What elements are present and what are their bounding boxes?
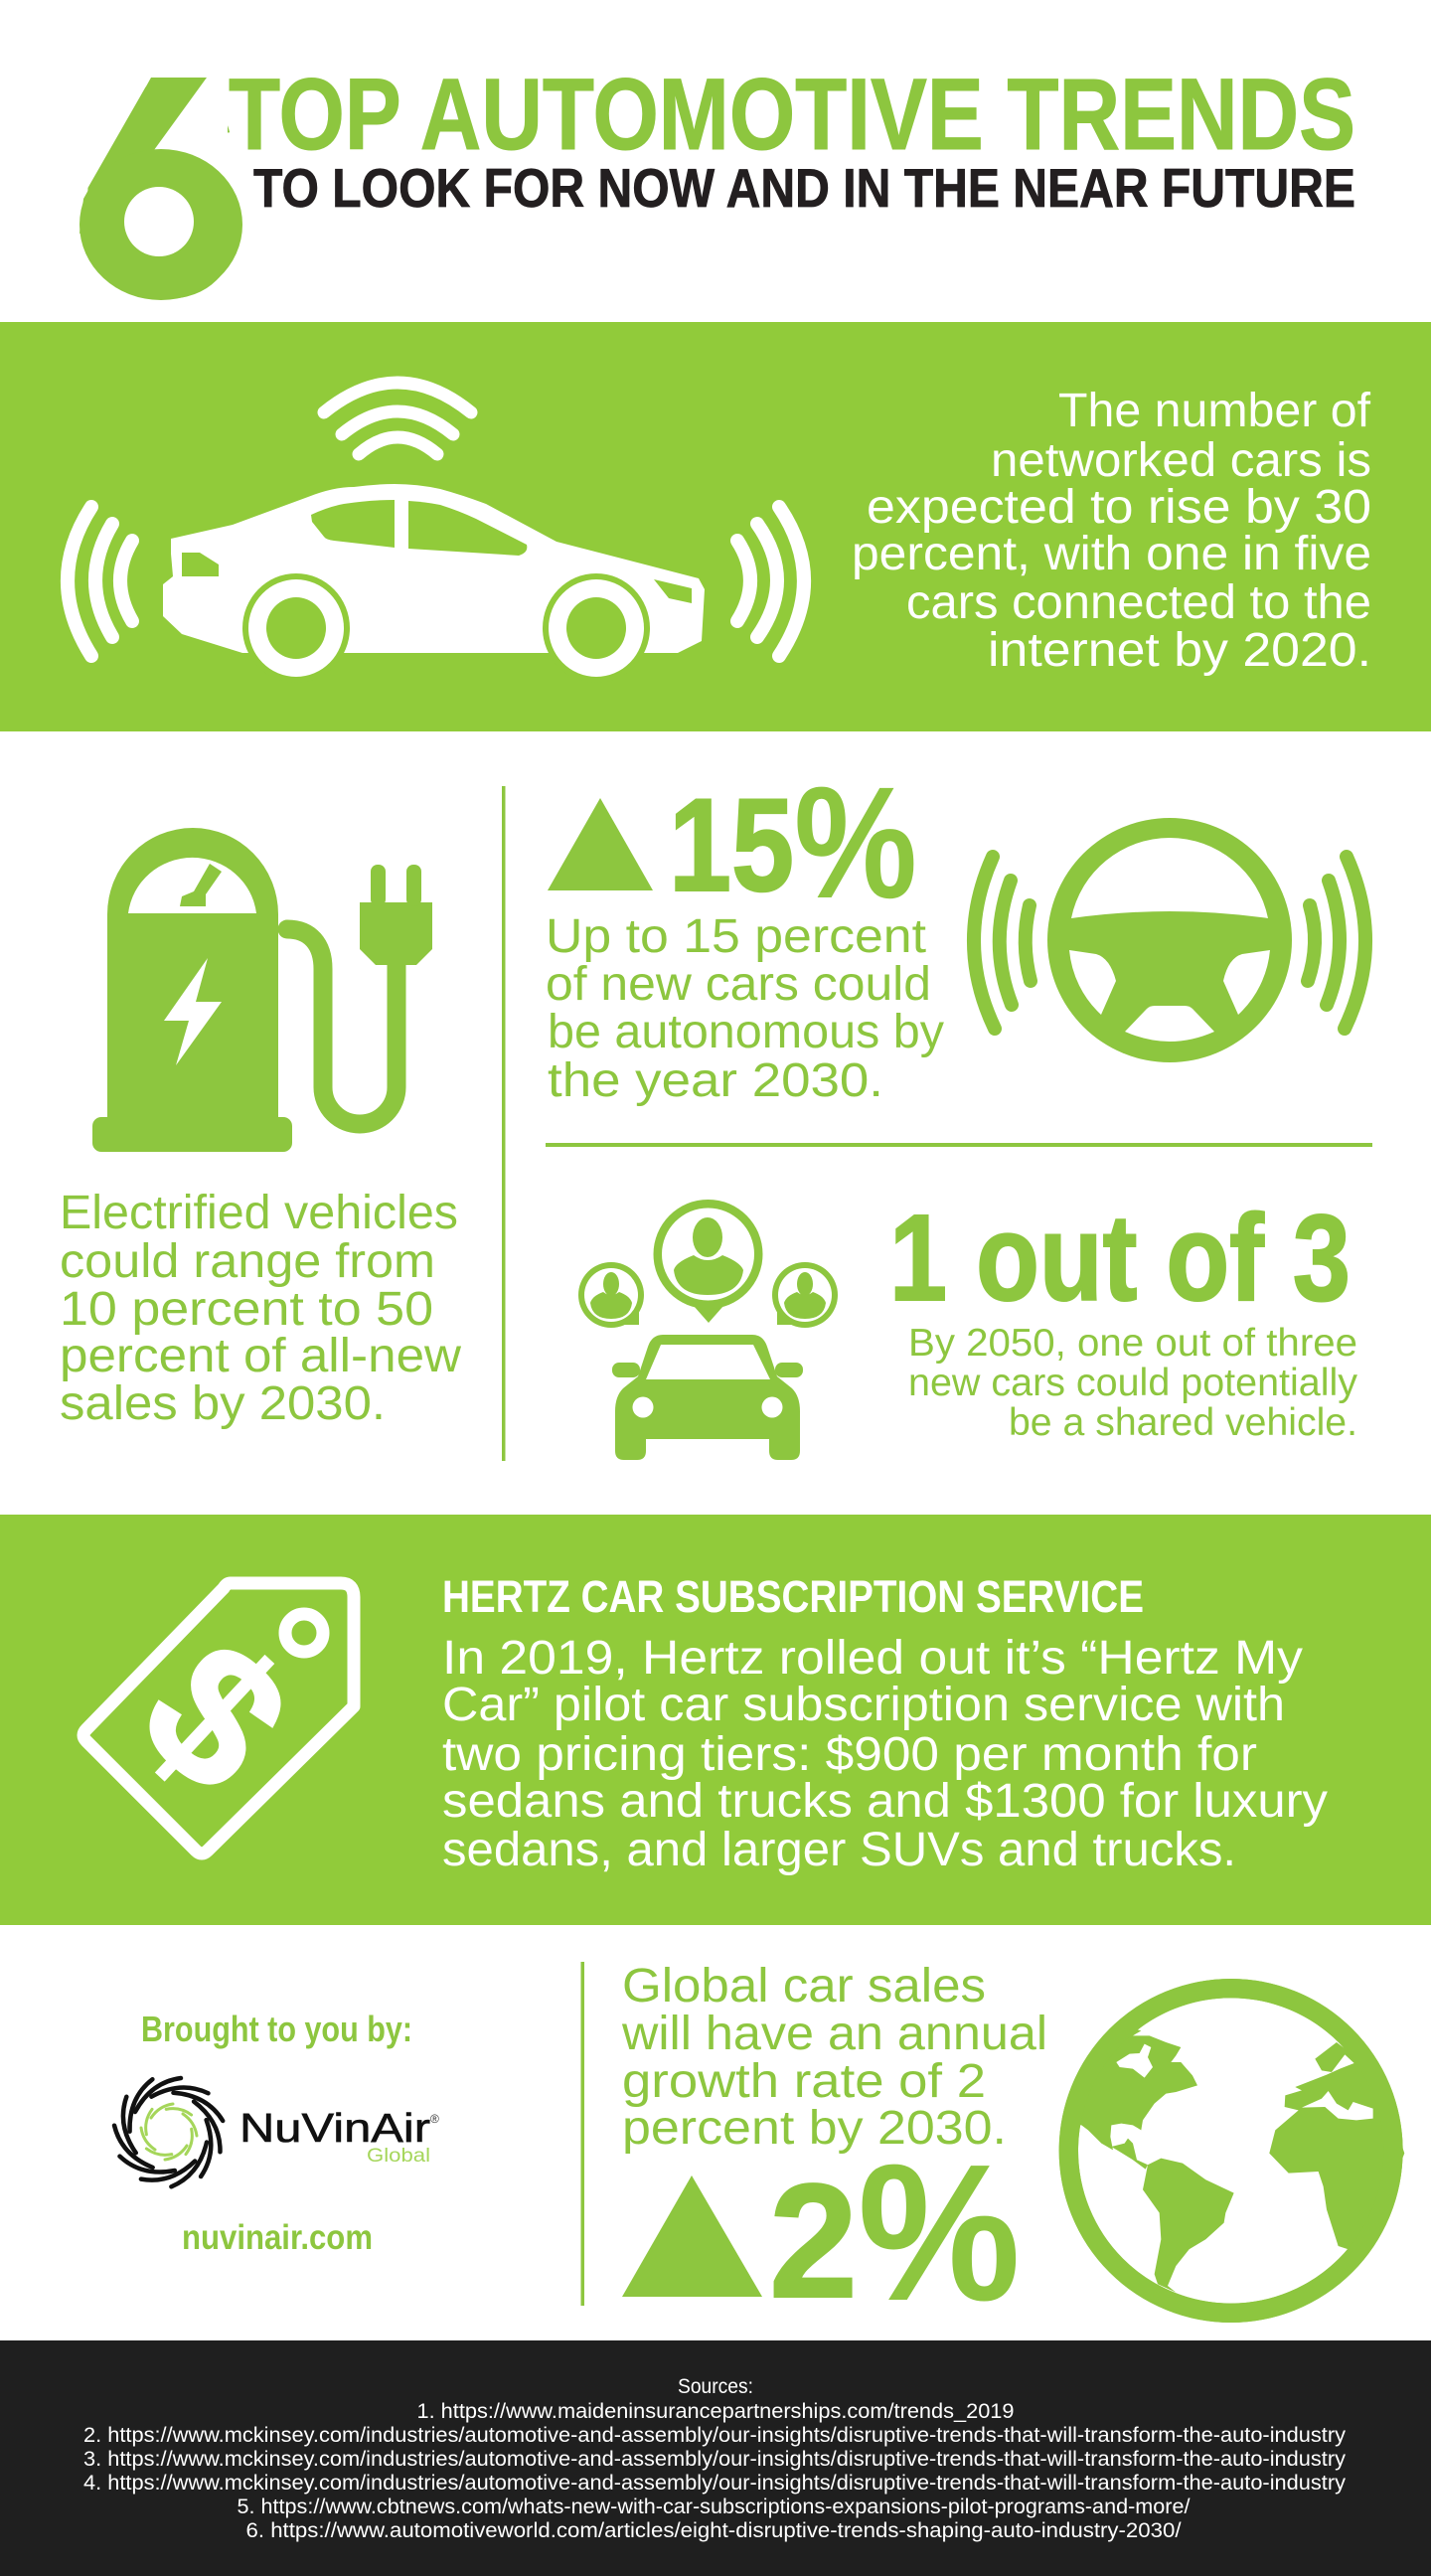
text: Hertz description: In 2019, Hertz rolled out it’s “Hertz My [442,1632,1303,1685]
logo wordmark [239,2105,439,2167]
stat: 2 percent [769,2124,1021,2341]
panel: autonomous cars [546,753,1365,1107]
stat: 1 out of 3: 1 out of 3 [889,1191,1351,1327]
text: Hertz description: Car” pilot car subscription service with [442,1679,1285,1731]
text: source list: 5. https://www.cbtnews.com/whats-new-with-car-subscriptions-expansions-pilot-programs-and-more/ [237,2496,1191,2518]
text: autonomous statistic: the year 2030. [548,1054,883,1107]
text: electrified vehicles statistic [60,1187,461,1430]
panel: networked cars [0,322,1431,731]
text: autonomous statistic: of new cars could [546,958,931,1011]
icon: up triangle [548,798,653,890]
title [55,22,1355,361]
panel: global car sales [621,1960,1404,2341]
logo wordmark: ® [430,2112,439,2126]
text: global sales statistic: Global car sales [622,1960,986,2012]
logo wordmark: Global [367,2146,430,2167]
text: shared vehicle statistic: new cars could potentially [908,1362,1358,1404]
icon: dollar price tag: $ [102,1600,329,1833]
text: website: nuvinair.com [182,2218,373,2257]
text: electrified vehicles statistic: percent of all-new [60,1330,461,1382]
text: electrified vehicles statistic: sales by 2030. [60,1377,386,1430]
text: global sales statistic: growth rate of 2 [622,2055,986,2108]
logo wordmark: NuVinAir [239,2105,430,2151]
text: source list: 3. https://www.mckinsey.com/industries/automotive-and-assembly/our-insights/disruptive-trends-that-will-transform-the-auto-industry [83,2448,1347,2471]
icon: up triangle [622,2175,762,2297]
heading: Hertz: HERTZ CAR SUBSCRIPTION SERVICE [442,1571,1144,1622]
text: shared vehicle statistic: By 2050, one out of three [908,1322,1357,1365]
text: global sales statistic: will have an annual [621,2008,1047,2060]
stat: 15 percent [669,753,917,931]
text: networked cars statistic [852,385,1371,677]
text: source list: 4. https://www.mckinsey.com/industries/automotive-and-assembly/our-insights/disruptive-trends-that-will-transform-the-auto-industry [83,2472,1347,2495]
text: networked cars statistic: expected to rise by 30 [867,481,1371,534]
text: source list: 1. https://www.maideninsurancepartnerships.com/trends_2019 [417,2400,1014,2423]
icon: connected car [163,484,705,683]
text: networked cars statistic: cars connected to the [906,576,1371,629]
icon: right signal waves [737,507,804,656]
text: networked cars statistic: networked cars is [991,434,1371,487]
icon: left signal waves [68,507,132,656]
text: networked cars statistic: percent, with one in five [852,528,1371,580]
icon: left wheel waves [974,857,1031,1029]
big number six: 6 [77,22,246,361]
text: networked cars statistic: internet by 2020. [988,624,1371,677]
icon: NuVinAir spiral logo [105,2068,232,2193]
text: electrified vehicles statistic: 10 percent to 50 [60,1283,433,1336]
text: brought to you by: Brought to you by: [141,2009,412,2049]
text: electrified vehicles statistic: could range from [60,1235,435,1288]
text: source list [83,2375,1347,2542]
icon: right wheel waves [1308,857,1365,1029]
text: source list: Sources: [678,2375,753,2398]
icon: steering wheel [1047,818,1292,1062]
text: autonomous statistic [546,910,944,1107]
text: autonomous statistic: Up to 15 percent [546,910,926,963]
icon: EV charger [92,828,432,1152]
text: Hertz description: sedans, and larger SUVs and trucks. [442,1824,1236,1876]
stat: 2 percent: 2 [769,2150,858,2332]
panel: electrified vehicles [60,828,461,1430]
text: source list: 2. https://www.mckinsey.com/industries/automotive-and-assembly/our-insights/disruptive-trends-that-will-transform-the-auto-industry [83,2424,1347,2447]
panel: sources footer [0,2340,1431,2576]
text: global sales statistic: percent by 2030. [622,2102,1007,2155]
text: Hertz description [442,1632,1328,1876]
icon: shared riders and car [578,1200,838,1460]
stat: 15 percent: % [794,753,917,931]
stat: 2 percent: % [858,2124,1021,2341]
icon: wifi signal [324,383,471,454]
panel: Hertz car subscription [0,1515,1431,1925]
text: Hertz description: sedans and trucks and $1300 for luxury [442,1775,1328,1828]
text: electrified vehicles statistic: Electrified vehicles [60,1187,458,1239]
text: autonomous statistic: be autonomous by [548,1006,944,1058]
text: Hertz description: two pricing tiers: $900 per month for [442,1728,1257,1781]
text: shared vehicle statistic: be a shared vehicle. [1009,1401,1357,1444]
icon: globe [1059,1979,1404,2323]
panel: shared vehicles [578,1191,1358,1460]
text: shared vehicle statistic [908,1322,1358,1444]
stat: 15 percent: 15 [669,772,794,919]
text: source list: 6. https://www.automotiveworld.com/articles/eight-disruptive-trends-shaping-auto-industry-2030/ [246,2519,1182,2542]
text: global sales statistic [621,1960,1047,2155]
text: networked cars statistic: The number of [1058,385,1371,437]
panel: sponsor [105,2009,439,2257]
